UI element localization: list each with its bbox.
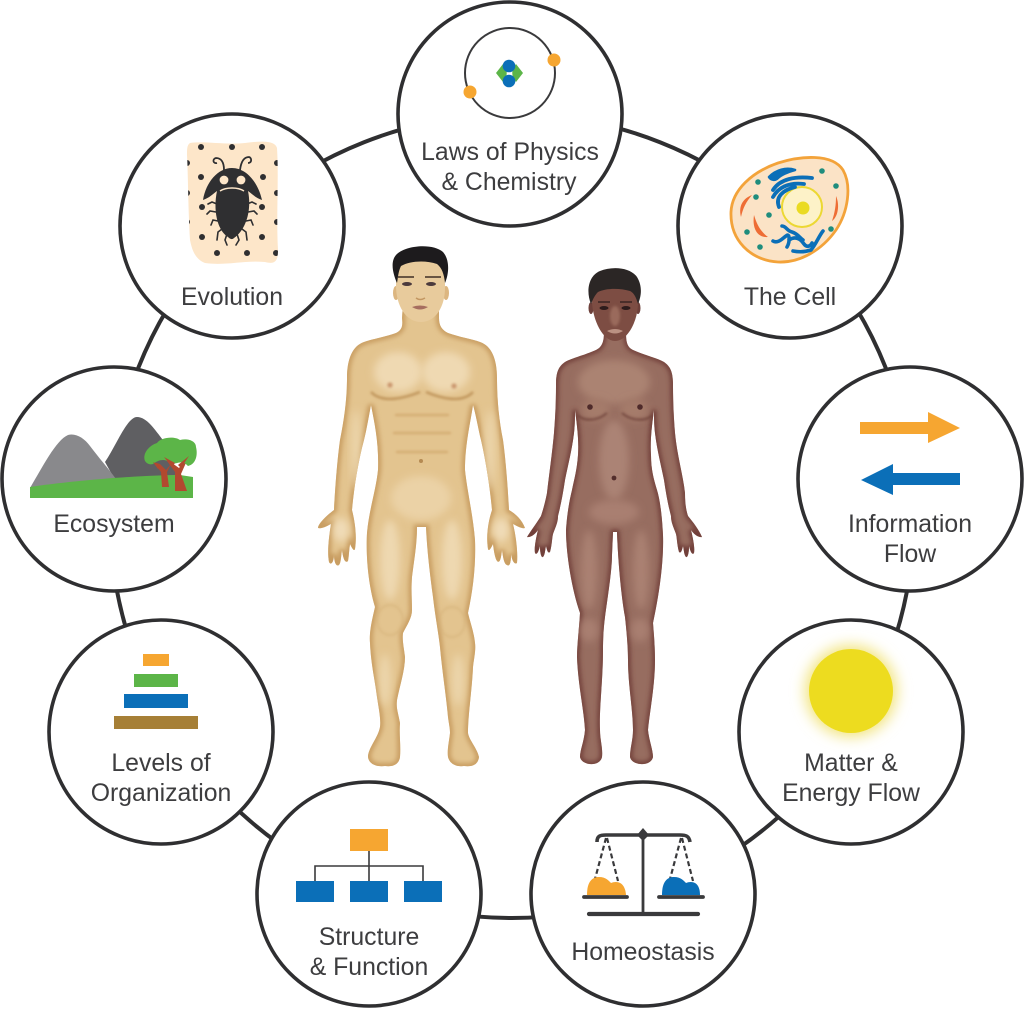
label: Evolution: [181, 284, 283, 311]
label: Laws of Physics: [421, 139, 599, 166]
label: Ecosystem: [53, 511, 175, 538]
panel: matter and energy flow: [739, 620, 963, 844]
female head: [588, 268, 641, 341]
label: Homeostasis: [571, 939, 715, 966]
figure: male anatomical figure: [310, 246, 530, 770]
label: Levels of: [111, 750, 211, 777]
figure: female anatomical figure: [520, 268, 710, 775]
label: Organization: [91, 780, 231, 807]
female body: [527, 335, 702, 764]
icon: hierarchy chart: [296, 829, 442, 902]
icon: atom: [464, 28, 560, 118]
label: Energy Flow: [782, 780, 920, 807]
icon: stacked pyramid: [114, 654, 198, 729]
panel: evolution: [120, 114, 344, 338]
label: & Chemistry: [441, 169, 577, 196]
label: The Cell: [744, 284, 836, 311]
icon: balance scale: [584, 828, 703, 914]
label: Information: [848, 511, 972, 538]
label: & Function: [310, 954, 428, 981]
panel: information flow: [798, 367, 1022, 591]
male body: [310, 300, 530, 770]
panel: the cell: [678, 114, 902, 338]
male head: [393, 246, 449, 322]
icon: fossil beetle: [184, 142, 280, 264]
icon: opposing arrows: [860, 412, 960, 495]
panel: laws of physics and chemistry: [398, 2, 622, 226]
label: Matter &: [804, 750, 898, 777]
icon: sun: [805, 645, 897, 737]
panel: ecosystem: [2, 367, 226, 591]
connecting ring: [110, 114, 914, 918]
panel: levels of organization: [49, 620, 273, 844]
icon: cell: [731, 157, 848, 262]
icon: mountains and trees: [30, 417, 197, 498]
panel: homeostasis: [531, 782, 755, 1006]
label: Flow: [884, 541, 936, 568]
label: Structure: [319, 924, 419, 951]
panel: structure and function: [257, 782, 481, 1006]
